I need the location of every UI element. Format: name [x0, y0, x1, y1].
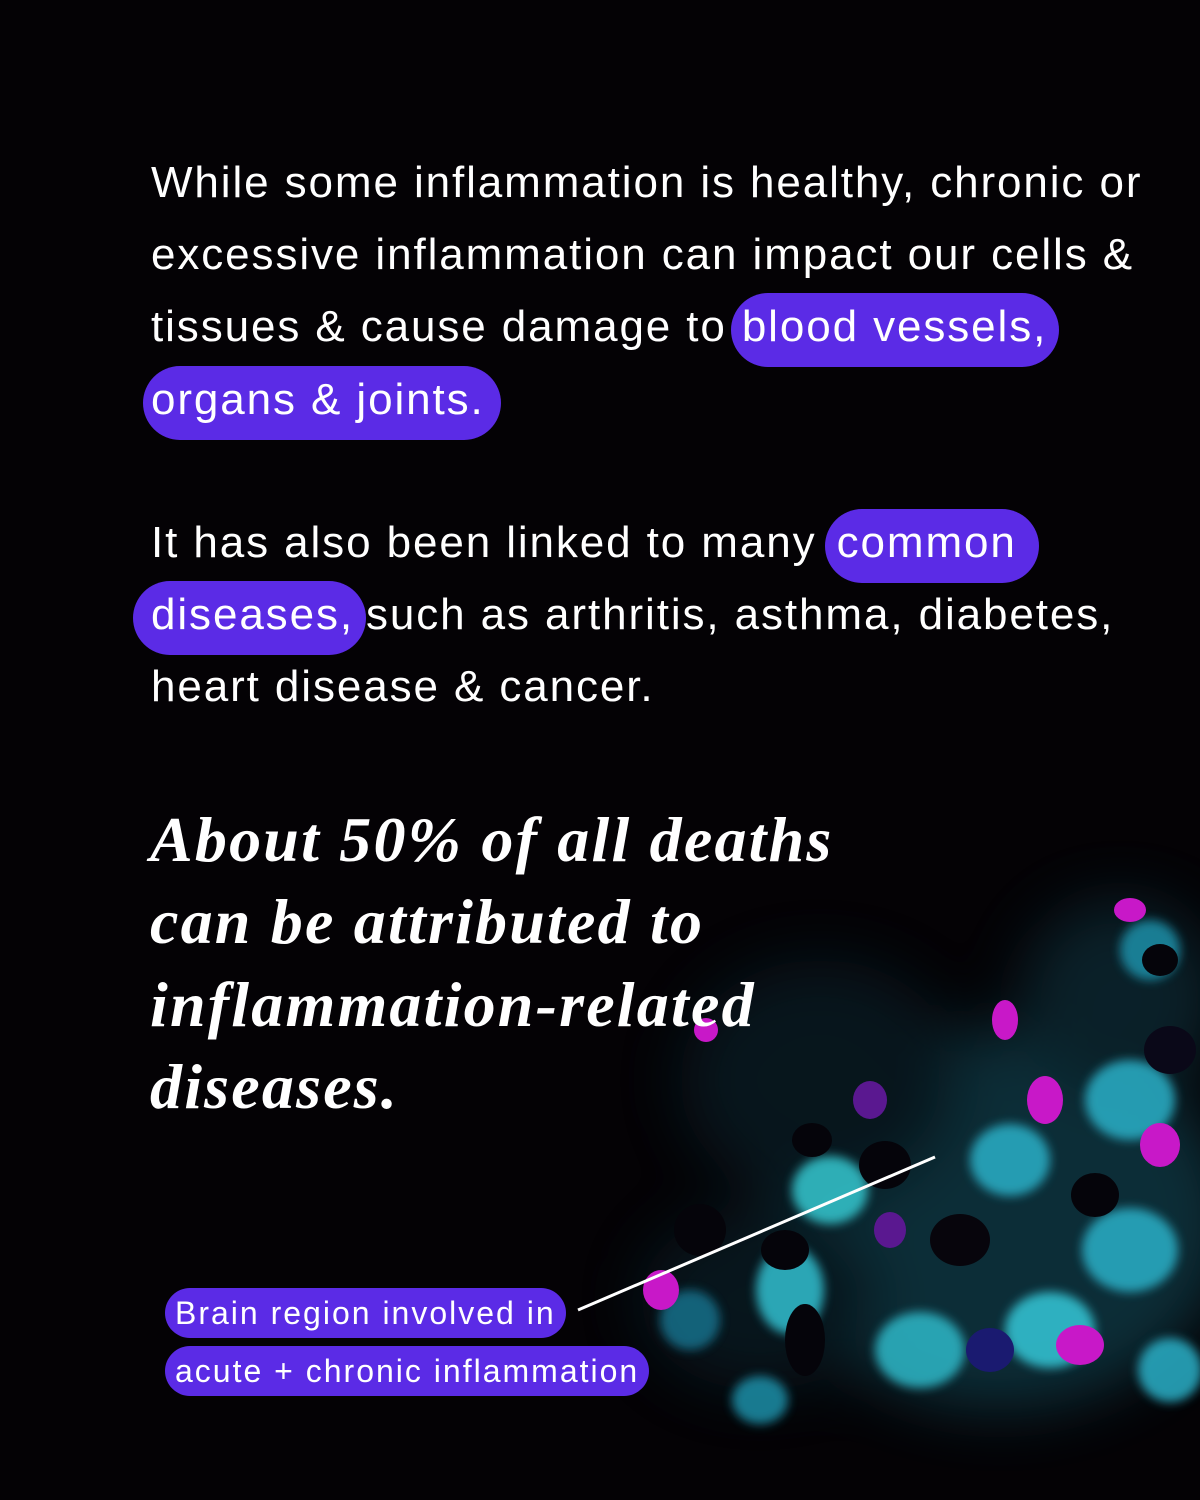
text block: paragraph 1: While some inflammation is healthy, chronic or — [151, 158, 1142, 207]
text block: paragraph 2: diseases, such as arthritis, asthma, diabetes, — [151, 590, 1114, 639]
arrow: pointer line — [578, 1157, 935, 1310]
callout: caption — [165, 1288, 649, 1396]
callout: caption: Brain region involved in — [175, 1295, 556, 1331]
heading: statistic: can be attributed to — [150, 886, 704, 957]
heading: statistic: diseases. — [150, 1051, 399, 1122]
heading: statistic — [146, 804, 834, 1122]
text block: paragraph 2 — [133, 509, 1114, 711]
text block: paragraph 1: organs & joints. — [151, 375, 485, 424]
text block: paragraph 2: heart disease & cancer. — [151, 662, 655, 711]
text block: paragraph 2: It has also been linked to many common — [151, 518, 1017, 567]
text block: paragraph 1: excessive inflammation can impact our cells & — [151, 230, 1134, 279]
heading: statistic: inflammation-related — [150, 969, 756, 1040]
callout: caption: acute + chronic inflammation — [175, 1353, 639, 1389]
heading: statistic: About 50% of all deaths — [150, 804, 834, 875]
text block: paragraph 1: tissues & cause damage to blood vessels, — [151, 302, 1047, 351]
text block: paragraph 1 — [143, 158, 1142, 440]
